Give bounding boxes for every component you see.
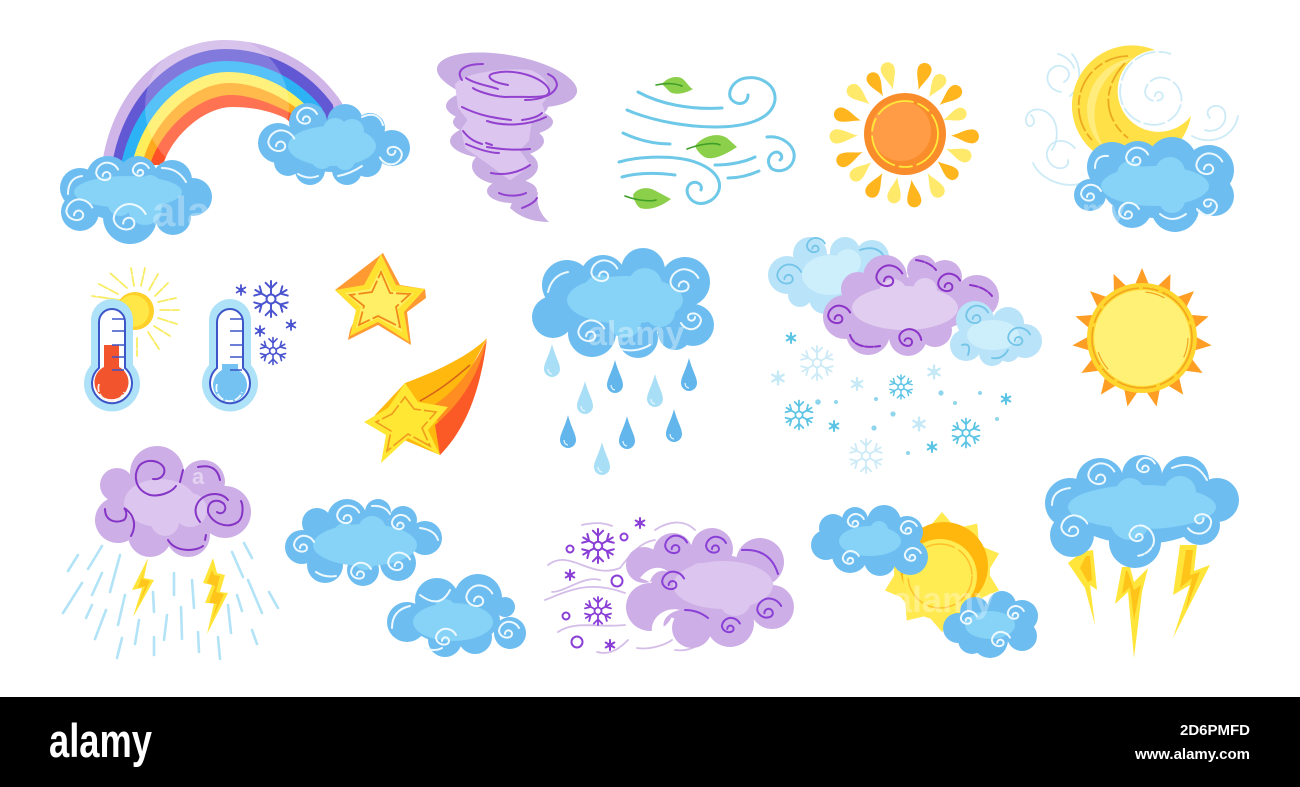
cloud — [626, 528, 794, 648]
icon: tornado — [433, 43, 581, 222]
watermark footer bar — [0, 697, 1300, 787]
cloud: rainbow left: ala — [152, 188, 211, 235]
cloud — [1045, 455, 1239, 568]
website: www.alamy.com — [1134, 746, 1250, 763]
thermometer body — [84, 299, 140, 412]
icon: sun behind clouds — [811, 505, 1038, 658]
snowflakes and bubbles — [562, 518, 644, 650]
icon: moon with cloud — [1026, 45, 1238, 232]
icon: rain cloud — [532, 248, 714, 475]
sun rays — [829, 61, 979, 208]
snowflakes — [772, 333, 1010, 473]
icon: sun behind clouds: alamy — [892, 579, 994, 620]
crescent moon — [1072, 45, 1191, 165]
cloud — [95, 446, 251, 557]
image id: 2D6PMFD — [1180, 722, 1250, 739]
lightning bolts — [1068, 545, 1210, 658]
icon: rainbow with clouds — [60, 35, 410, 244]
icon: snow clouds — [768, 237, 1042, 473]
cloud lower right — [943, 591, 1038, 658]
icon: thunder cloud — [1045, 455, 1239, 658]
icon: lilac storm cloud with rain and lightning — [63, 446, 278, 659]
icon: shooting star — [364, 338, 487, 463]
cloud: a — [192, 464, 205, 489]
wind lines — [545, 522, 705, 653]
lilac cloud — [823, 255, 999, 356]
sun — [881, 512, 1003, 632]
spikes — [1071, 268, 1213, 409]
small sun — [92, 268, 179, 356]
icon: yellow spiky sun — [1071, 268, 1213, 409]
cloud: rainbow right — [258, 103, 410, 185]
icon: cold thermometer with snowflakes — [202, 281, 295, 412]
icon: hot thermometer with sun — [84, 268, 179, 412]
icon: purple snow wind cloud — [545, 518, 794, 653]
lightning bolts — [132, 558, 228, 634]
cloud — [532, 248, 714, 358]
cloud upper — [285, 499, 442, 586]
raindrops — [544, 344, 697, 475]
spiral — [1120, 52, 1182, 125]
cloud: alamy — [588, 315, 684, 353]
cloud: my — [1082, 194, 1126, 227]
icon: star — [335, 253, 426, 345]
cloud upper left — [811, 505, 928, 576]
cloud — [1074, 137, 1234, 232]
icon: orange sun — [829, 61, 979, 208]
snowflakes — [237, 281, 295, 364]
rain streaks — [63, 543, 278, 659]
icon: two blue clouds — [285, 499, 526, 657]
pale cloud front — [950, 301, 1042, 366]
cloud: rainbow left — [60, 156, 212, 244]
alamy logo: alamy — [49, 714, 152, 767]
cloud lower — [387, 574, 526, 657]
rainbow arc — [102, 35, 342, 179]
icon: wind with leaves — [619, 77, 794, 209]
pale cloud back — [768, 237, 889, 314]
pale swirls — [1026, 54, 1238, 185]
